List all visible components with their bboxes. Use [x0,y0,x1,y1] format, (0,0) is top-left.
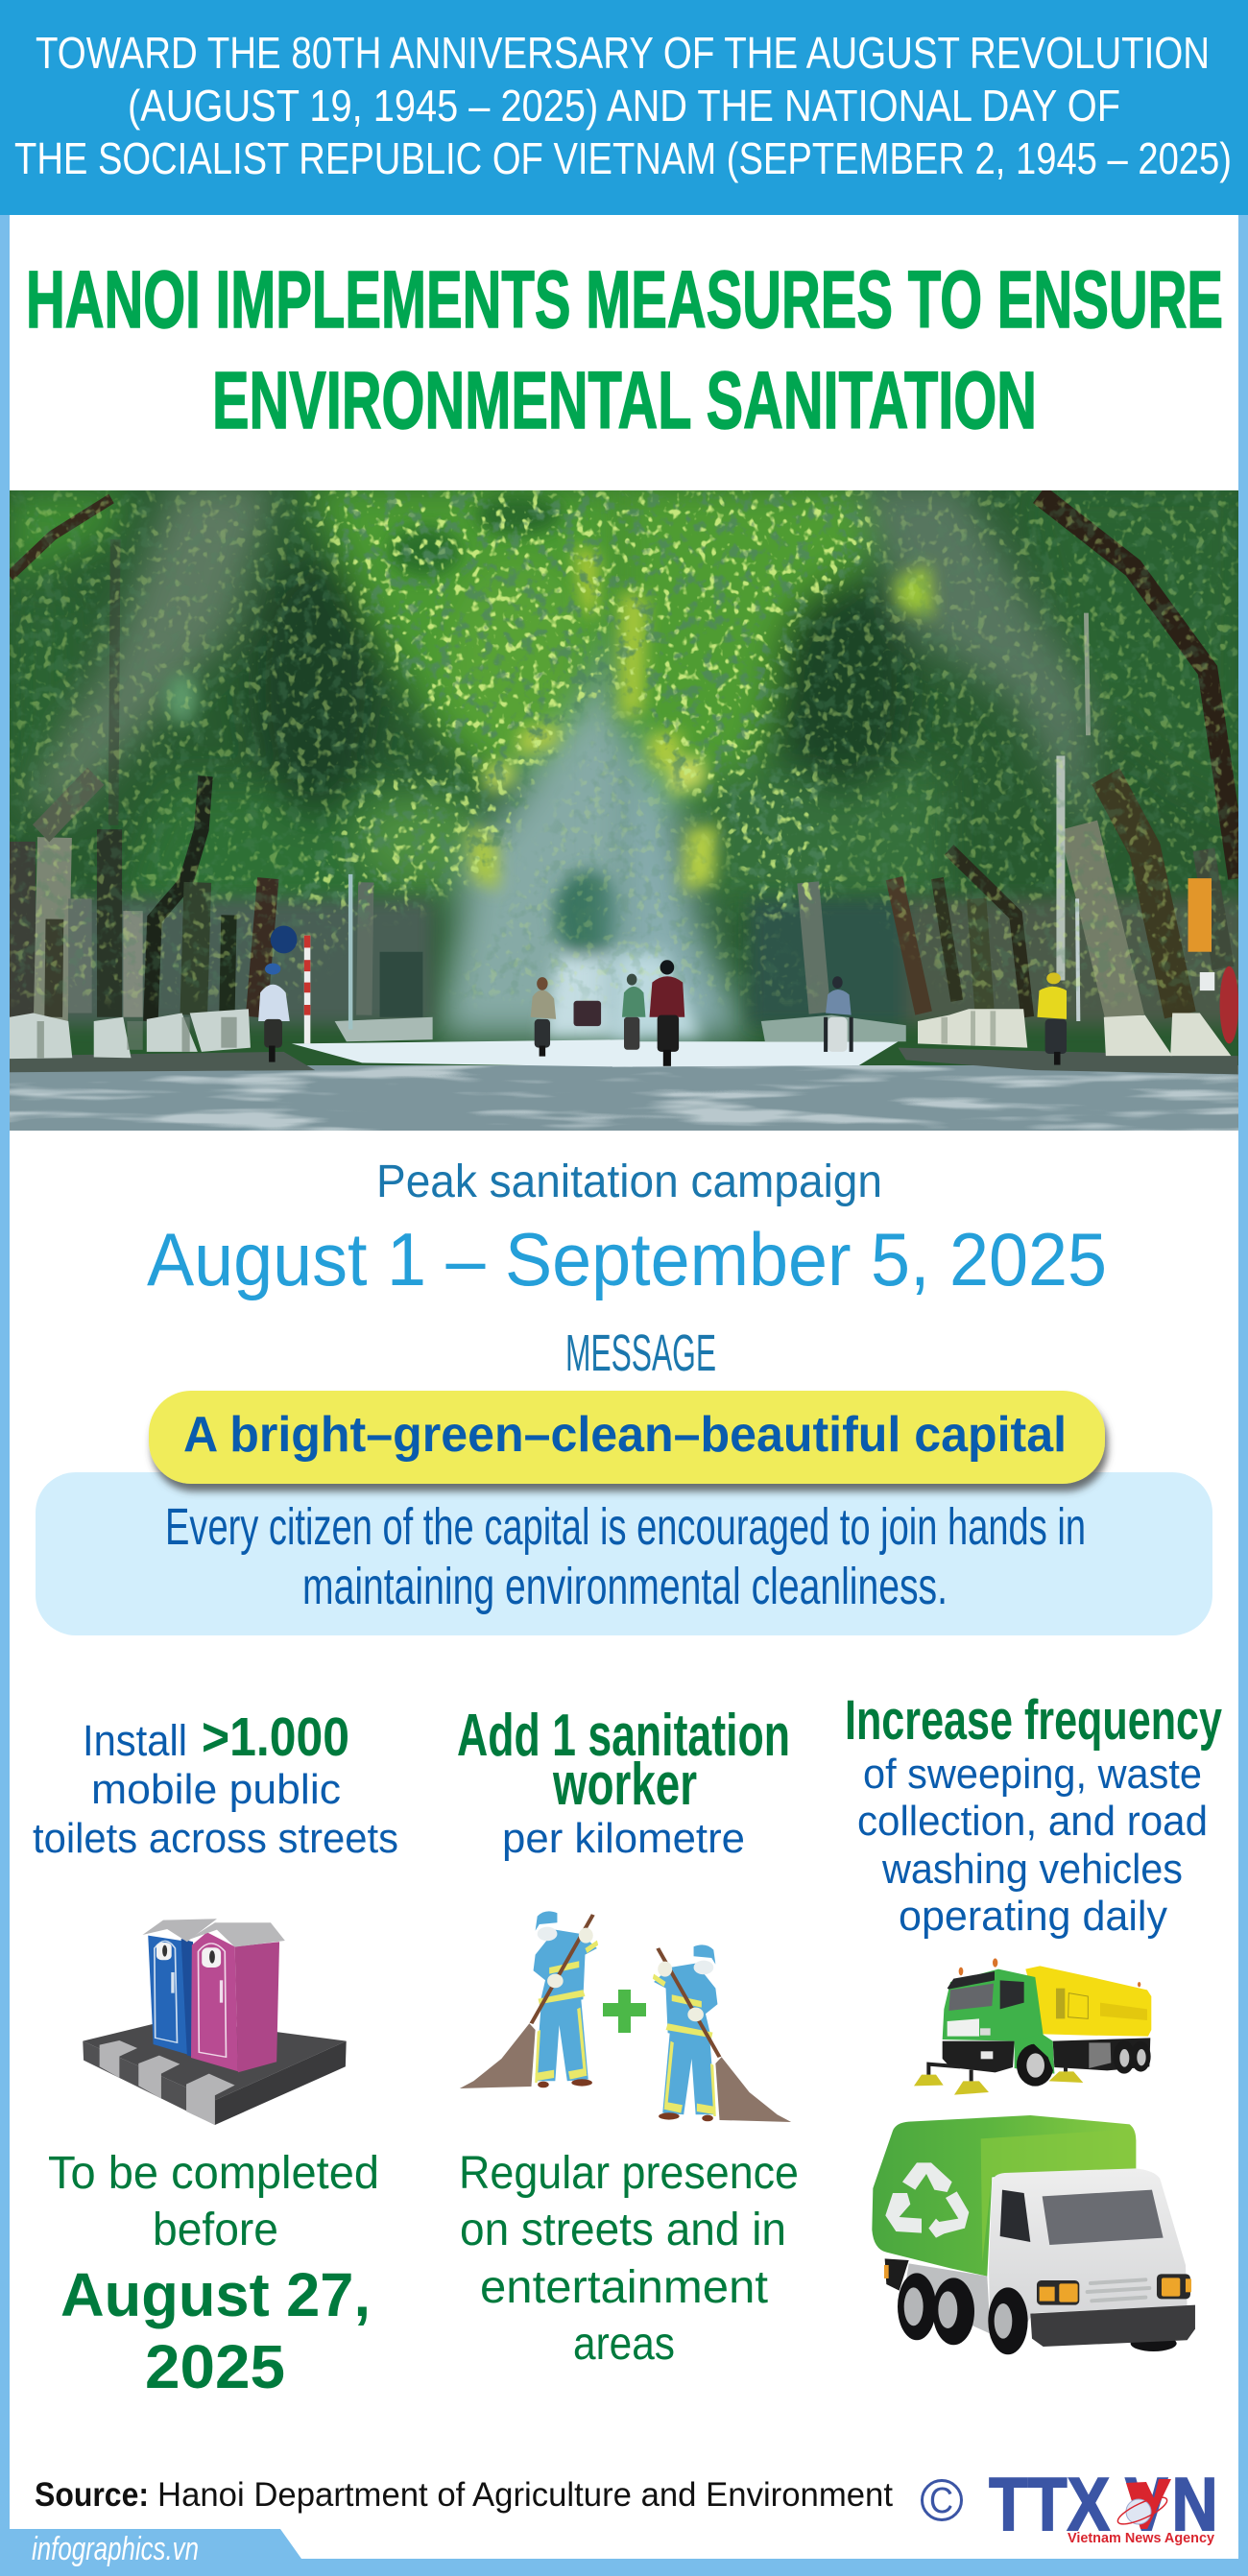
photo foreground left half [10,874,633,1072]
column 1: toilets text: Install [83,1716,187,1765]
column 2: presence text: Regular presence [459,2148,799,2199]
column 1: toilets text: >1.000 [202,1706,349,1768]
icon: sanitation worker, left [460,1911,598,2088]
message pill: A bright–green–clean–beautiful capital [183,1407,1067,1463]
icon: mobile public toilets on pavement [83,1919,347,2125]
source line: Source: [35,2476,149,2514]
header banner [0,0,1248,215]
icon: copyright: C [929,2481,953,2521]
column 1: toilets text [33,1706,398,1862]
column 2: workers text [457,1703,790,1862]
logo: TTXVN Vietnam News Agency: Vietnam News Agency [1068,2531,1214,2546]
column 3: frequency text [845,1689,1222,1940]
photo road surface [10,1065,1238,1131]
campaign dates: August 1 – September 5, 2025 [147,1217,1107,1301]
column 1: deadline text: August 27, [60,2260,371,2329]
column 1: deadline text [48,2148,379,2401]
photo background masses, right half coordinates [616,482,1247,1038]
message heading: MESSAGE [565,1324,716,1382]
column 2: presence text: on streets and in [460,2205,786,2255]
header banner: (AUGUST 19, 1945 – 2025) AND THE NATIONAL DAY OF [128,81,1120,131]
column 1: toilets text: mobile public [91,1766,341,1813]
column 3: frequency text: operating daily [899,1893,1167,1940]
photo background masses, left half coordinates [2,482,633,1038]
column 2: workers text: Add 1 sanitation [457,1703,790,1769]
rider and street furniture [271,925,297,953]
photo foreground right half [612,878,1238,1074]
column 1: deadline text: before [153,2205,278,2255]
footer site tab: infographics.vn [32,2531,199,2567]
campaign label: Peak sanitation campaign [376,1157,882,1207]
photo: tree-lined Hanoi street with motorbikes [2,482,1247,1131]
column 2: presence text [459,2148,799,2370]
source line: Hanoi Department of Agriculture and Environment [157,2476,893,2514]
logo: TTXVN Vietnam News Agency: TTXVN [989,2463,1217,2546]
column 1: deadline text: 2025 [145,2332,285,2401]
column 3: frequency text: collection, and road [857,1798,1208,1845]
column 3: frequency text: of sweeping, waste [863,1751,1202,1798]
column 2: presence text: entertainment [480,2262,768,2313]
column 3: frequency text: washing vehicles [881,1846,1183,1893]
column 1: deadline text: To be completed [48,2148,379,2199]
icon: copyright [922,2480,962,2521]
icon: road sweeper truck [914,1958,1151,2095]
panel: citizen appeal [36,1472,1212,1635]
column 2: workers text: worker [552,1752,697,1818]
panel: citizen appeal: maintaining environmental cleanliness. [302,1558,948,1615]
icon: green garbage truck [872,2115,1195,2354]
column 2: presence text: areas [573,2319,675,2370]
icon: sanitation worker, right [653,1944,791,2122]
title [26,254,1223,445]
column 1: toilets text: toilets across streets [33,1815,398,1862]
column 2: workers text: per kilometre [502,1815,745,1862]
photo leaf texture [10,490,1238,1009]
message pill [149,1391,1105,1484]
icon: plus sign [603,1990,646,2033]
